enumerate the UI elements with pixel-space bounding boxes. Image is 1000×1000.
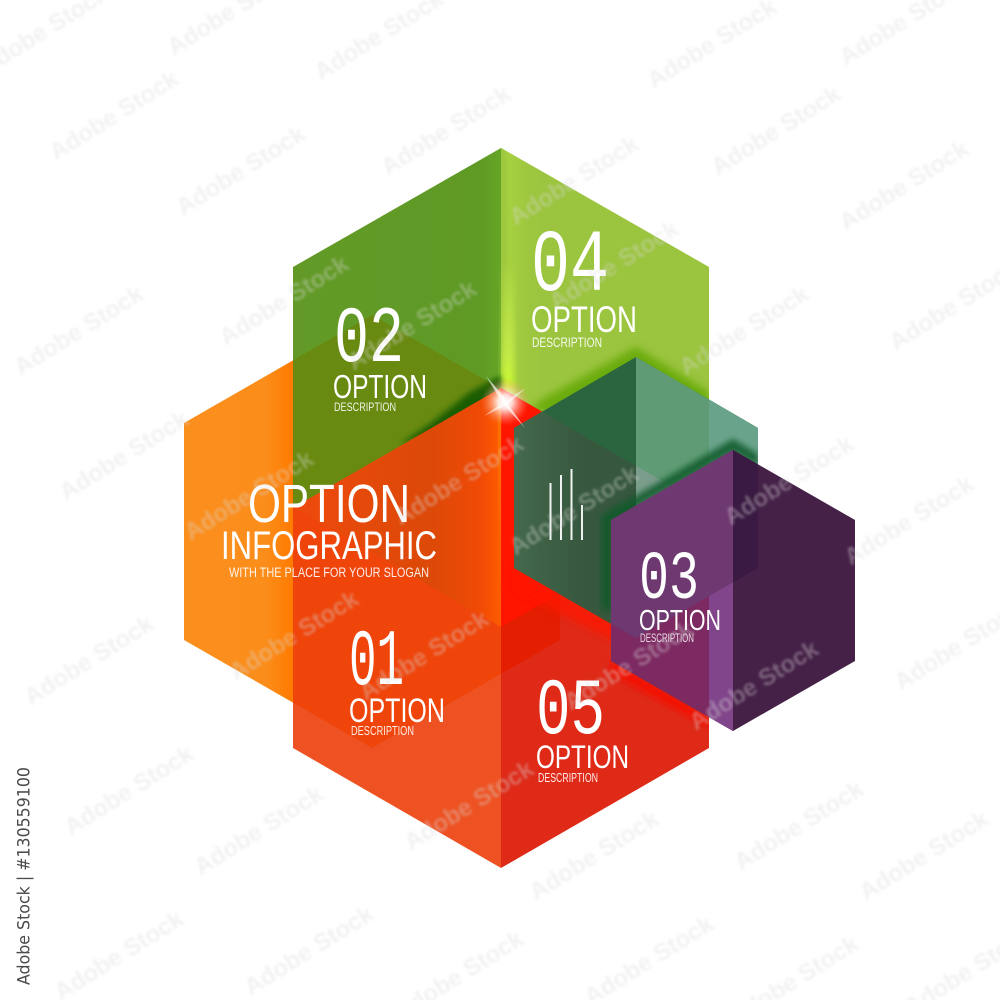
stock watermark pattern: Adobe Stock — [20, 610, 159, 711]
icon: bar lines — [550, 469, 583, 540]
label: option 04: 04 — [531, 218, 609, 317]
stock watermark pattern: Adobe Stock — [720, 430, 859, 531]
stock watermark pattern: Adobe Stock — [180, 445, 319, 546]
label: option 05: DESCRIPTION — [538, 771, 598, 785]
stock watermark pattern: Adobe Stock — [855, 805, 994, 906]
stock watermark pattern: Adobe Stock — [45, 65, 184, 166]
panel: teal hexagon — [514, 357, 758, 624]
stock watermark pattern: Adobe Stock — [60, 740, 199, 841]
stock watermark pattern: Adobe Stock — [685, 635, 824, 736]
label: option 01: OPTION — [349, 692, 445, 730]
stock watermark pattern: Adobe Stock — [707, 80, 846, 181]
stock watermark pattern: Adobe Stock — [835, 135, 974, 236]
label: option 02: 02 — [334, 295, 404, 386]
stock watermark pattern: Adobe Stock — [55, 405, 194, 506]
stock watermark pattern: Adobe Stock — [545, 215, 684, 316]
panel: red hexagon — [293, 380, 709, 870]
stock watermark pattern: Adobe Stock — [560, 615, 699, 716]
stock watermark pattern: Adobe Stock — [525, 805, 664, 906]
stock watermark pattern: Adobe Stock — [172, 120, 311, 221]
label: option 03: 03 — [639, 541, 699, 619]
stock watermark pattern: Adobe Stock — [840, 470, 979, 571]
stock watermark pattern: Adobe Stock — [343, 275, 482, 376]
stock watermark pattern: Adobe Stock — [400, 755, 539, 856]
panel: orange hexagon — [184, 315, 560, 748]
lens flare — [481, 376, 529, 428]
stock watermark pattern: Adobe Stock — [377, 80, 516, 181]
stock watermark pattern: Adobe Stock — [505, 460, 644, 561]
stock watermark pattern: Adobe Stock — [190, 780, 329, 881]
label: option 01: 01 — [349, 618, 404, 709]
label: option 04: OPTION — [531, 299, 637, 340]
stock watermark pattern: Adobe Stock — [355, 605, 494, 706]
stock watermark pattern: Adobe Stock — [215, 250, 354, 351]
panel: purple hexagon — [611, 440, 855, 740]
stock id side label: Adobe Stock | #130559100 — [14, 767, 34, 985]
panel: green hexagon — [293, 148, 709, 504]
stock watermark pattern: Adobe Stock — [240, 900, 379, 1000]
label: option 04: DESCRIPTION — [532, 335, 602, 350]
label: option 01: DESCRIPTION — [351, 724, 414, 738]
stock watermark pattern: Adobe Stock — [675, 280, 814, 381]
label: option 05: 05 — [536, 667, 605, 758]
stock watermark pattern: Adobe Stock — [10, 280, 149, 381]
stock watermark pattern: Adobe Stock — [505, 130, 644, 231]
heading: option infographic — [221, 474, 437, 580]
label: option 02: DESCRIPTION — [334, 400, 396, 414]
label: option 03: OPTION — [639, 605, 721, 637]
stock watermark pattern: Adobe Stock — [730, 775, 869, 876]
label: option 02: OPTION — [333, 368, 427, 405]
stock watermark pattern: Adobe Stock — [225, 585, 364, 686]
heading: option infographic: OPTION — [248, 474, 410, 534]
stock watermark pattern: Adobe Stock — [390, 430, 529, 531]
label: option 03: DESCRIPTION — [640, 633, 694, 645]
heading: option infographic: WITH THE PLACE FOR YOUR SLOGAN — [229, 565, 429, 580]
heading: option infographic: INFOGRAPHIC — [221, 524, 437, 568]
label: option 05: OPTION — [536, 739, 629, 775]
